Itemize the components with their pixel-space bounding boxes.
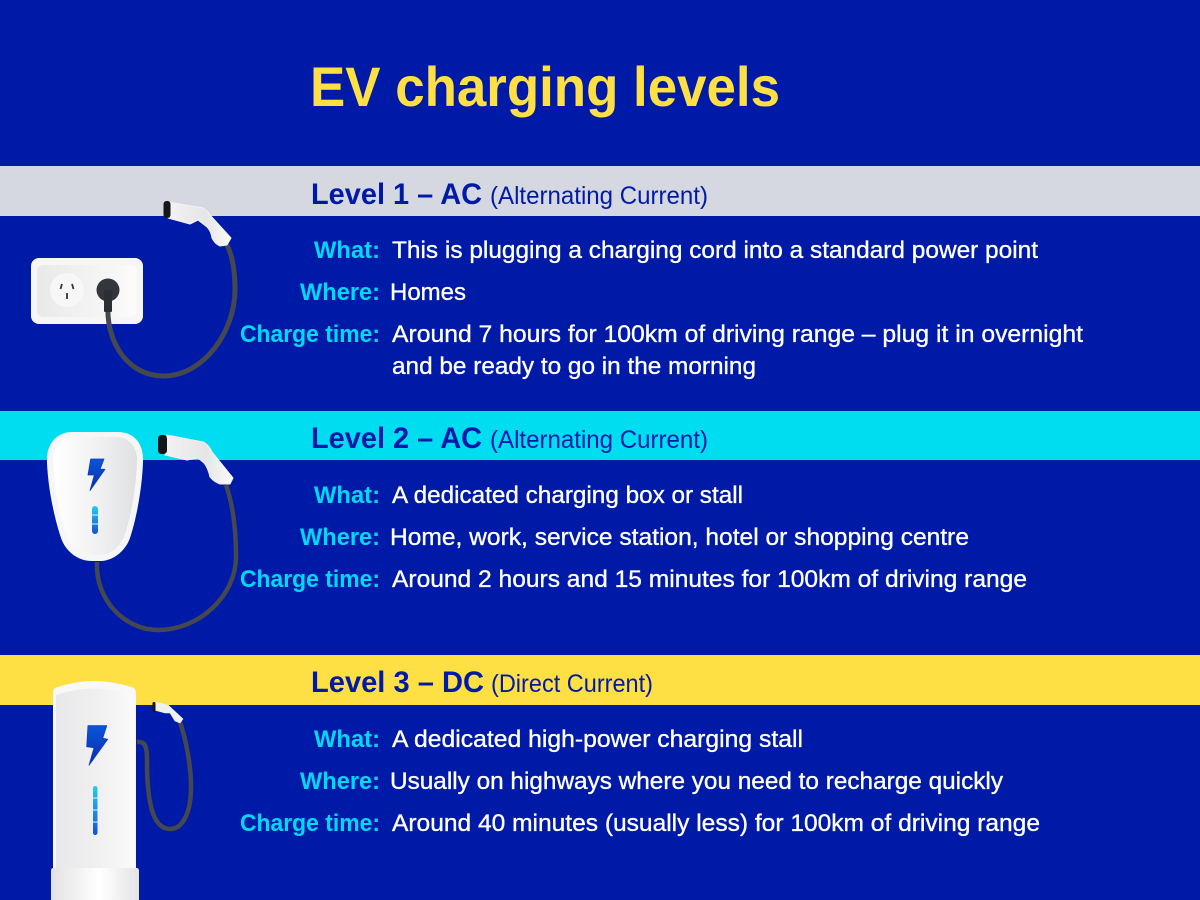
level 2 what: A dedicated charging box or stall xyxy=(392,482,743,509)
level 3 where: Where: xyxy=(300,768,380,795)
level 2 what: What: xyxy=(314,482,380,509)
icon: power point with charging cord xyxy=(31,201,235,376)
title: EV charging levels xyxy=(310,55,780,118)
icon: high-power charging stall xyxy=(51,681,191,900)
level 1 header bar xyxy=(0,166,1200,216)
level 1 charge time: Around 7 hours for 100km of driving range – plug it in overnight xyxy=(392,321,1083,348)
level 2 charge time: Around 2 hours and 15 minutes for 100km of driving range xyxy=(392,566,1027,593)
level 3 subheading: (Direct Current) xyxy=(491,670,653,698)
level 2 header bar xyxy=(0,411,1200,460)
level 2 where: Home, work, service station, hotel or shopping centre xyxy=(390,524,969,551)
level 1 where xyxy=(300,279,466,306)
level 1 subheading: (Alternating Current) xyxy=(490,182,708,210)
level 1 charge time: and be ready to go in the morning xyxy=(392,353,756,380)
level 2 where: Where: xyxy=(300,524,380,551)
level 2 subheading: (Alternating Current) xyxy=(490,426,708,454)
level 1 where: Where: xyxy=(300,279,380,306)
level 1 charge time xyxy=(240,321,1083,380)
level 2 charge time: Charge time: xyxy=(240,566,380,593)
panel: level 1 xyxy=(0,166,1200,380)
level 3 what: A dedicated high-power charging stall xyxy=(392,726,803,753)
level 3 heading: Level 3 – DC xyxy=(311,666,484,699)
level 1 heading: Level 1 – AC xyxy=(311,178,482,211)
level 1 charge time: Charge time: xyxy=(240,321,380,348)
level 3 where: Usually on highways where you need to recharge quickly xyxy=(390,768,1004,795)
panel: level 3 xyxy=(0,655,1200,900)
level 2 heading: Level 2 – AC xyxy=(311,422,482,455)
level 1 what: What: xyxy=(314,237,380,264)
level 3 charge time: Around 40 minutes (usually less) for 100km of driving range xyxy=(392,810,1040,837)
level 3 charge time: Charge time: xyxy=(240,810,380,837)
level 1 where: Homes xyxy=(390,279,466,306)
icon: wall charging box xyxy=(47,432,236,630)
level 3 header bar xyxy=(0,655,1200,705)
level 1 what: This is plugging a charging cord into a standard power point xyxy=(392,237,1038,264)
level 3 what: What: xyxy=(314,726,380,753)
panel: level 2 xyxy=(0,411,1200,630)
